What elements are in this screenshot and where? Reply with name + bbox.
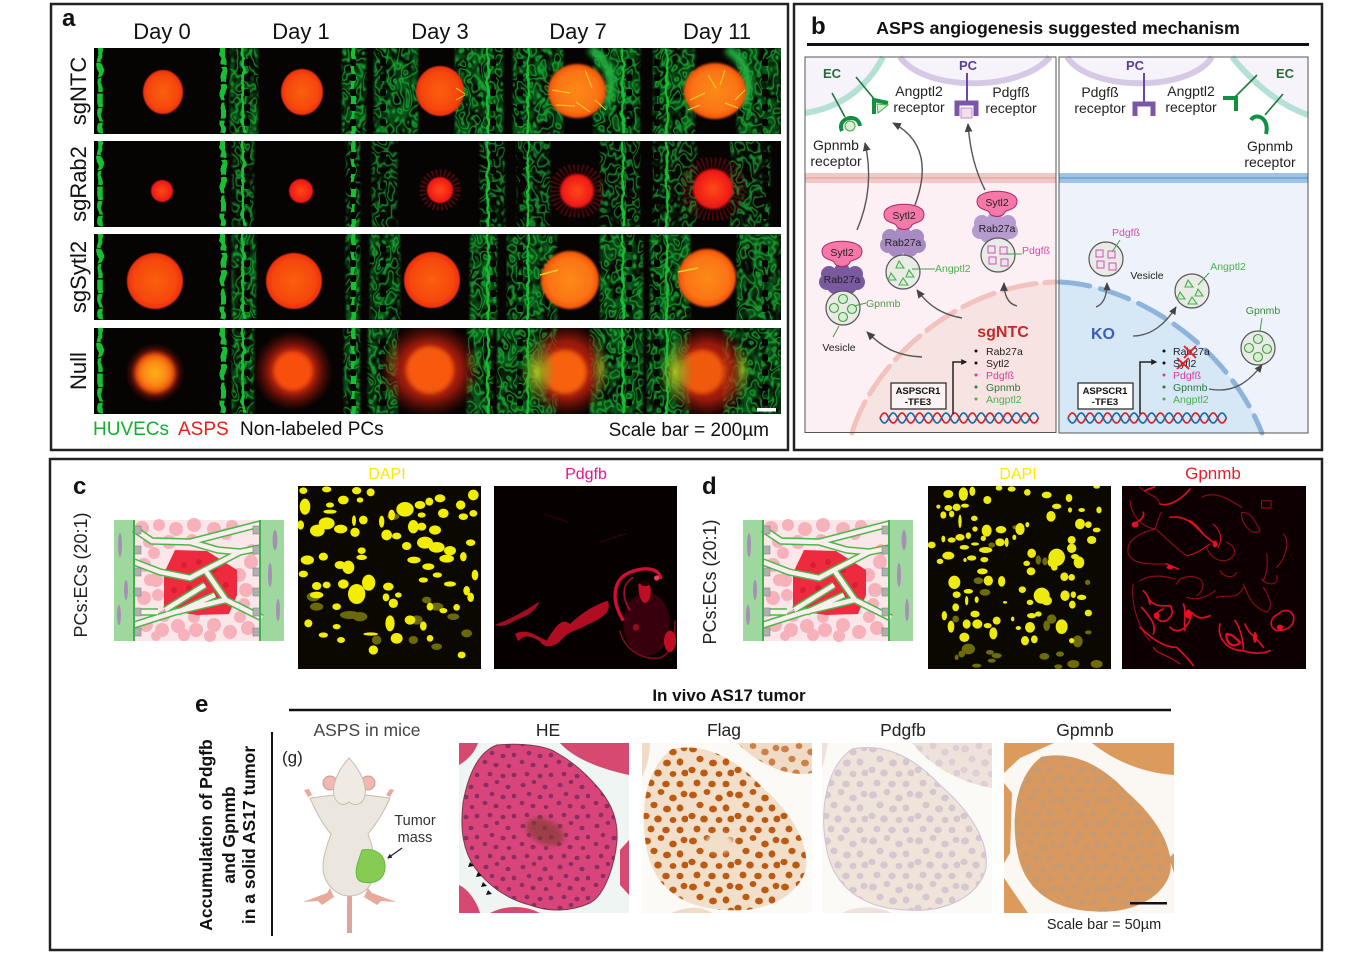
day column headers: Day 3 xyxy=(411,19,469,44)
day column headers: Day 7 xyxy=(549,19,607,44)
day column headers: Day 11 xyxy=(683,19,751,44)
vesicle complexes: Sytl2 xyxy=(892,210,916,222)
free vesicles xyxy=(1089,227,1280,365)
Flag heading: Flag xyxy=(707,720,741,740)
panel letter c: c xyxy=(73,473,86,500)
row labels: sgNTC xyxy=(66,57,91,125)
gene list with crosses: Angptl2 xyxy=(1173,394,1209,406)
scale bar xyxy=(757,408,776,412)
receptor labels: receptor xyxy=(1244,154,1296,170)
secretion arrows xyxy=(1096,283,1262,390)
gene list: Sytl2 xyxy=(986,358,1010,370)
gene list xyxy=(974,346,1023,406)
gene list: Angptl2 xyxy=(986,394,1022,406)
receptors xyxy=(1126,58,1295,134)
scale bar caption: Scale bar = 50µm xyxy=(1047,917,1161,933)
DAPI micrograph xyxy=(297,486,481,669)
day column headers xyxy=(133,19,751,44)
row sgRab2 image strip xyxy=(94,141,781,227)
transcription factor box: ASPSCR1 xyxy=(896,386,941,397)
scale bar xyxy=(1130,902,1167,904)
legend: Non-labeled PCs xyxy=(240,419,384,440)
transcription factor box xyxy=(1078,383,1133,409)
Pdgfb micrograph xyxy=(494,486,677,669)
transcription factor box: -TFE3 xyxy=(1092,397,1118,408)
receptor labels: receptor xyxy=(985,100,1037,116)
receptor labels: Pdgfß xyxy=(1081,84,1119,100)
vesicle complexes: Vesicle xyxy=(822,342,856,354)
row labels: sgRab2 xyxy=(66,146,91,222)
KO label: KO xyxy=(1091,326,1115,343)
tumor mass label xyxy=(388,813,436,858)
row sgNTC image strip xyxy=(94,48,781,134)
receptor labels: receptor xyxy=(1165,99,1217,115)
co-culture schematic xyxy=(743,518,913,642)
gene list: Pdgfß xyxy=(986,370,1014,382)
section title: In vivo AS17 tumor xyxy=(652,686,806,705)
EC and PC receptors xyxy=(823,58,978,131)
receptor labels: Gpnmb xyxy=(1247,138,1293,154)
vertical description: in a solid AS17 tumor xyxy=(239,746,259,924)
gene list: Rab27a xyxy=(986,346,1023,358)
panel letter b: b xyxy=(811,13,826,40)
DAPI heading: DAPI xyxy=(368,466,406,483)
DAPI heading: DAPI xyxy=(999,466,1037,483)
panel letter e: e xyxy=(195,691,208,718)
Gpnmb micrograph xyxy=(1122,486,1306,669)
panel d xyxy=(700,464,1306,669)
icon: mouse with tumor xyxy=(303,758,396,933)
row Null image strip xyxy=(94,328,781,414)
panel c xyxy=(71,466,677,669)
secretion arrows xyxy=(857,123,1017,357)
Pdgfb heading: Pdgfb xyxy=(565,466,607,483)
vesicle complexes: Angptl2 xyxy=(935,263,971,275)
g label: (g) xyxy=(282,748,303,767)
free vesicles: Vesicle xyxy=(1130,270,1164,282)
axis label: PCs:ECs (20:1) xyxy=(71,512,91,638)
receptor labels: Pdgfß xyxy=(992,84,1030,100)
row labels: Null xyxy=(66,352,91,390)
panel letter a: a xyxy=(62,5,76,32)
gene list with crosses: Rab27a xyxy=(1173,346,1210,358)
vesicle complexes: Sytl2 xyxy=(830,247,854,259)
receptor labels: Angptl2 xyxy=(895,83,943,99)
panel b title: ASPS angiogenesis suggested mechanism xyxy=(876,18,1240,38)
receptor labels: receptor xyxy=(1074,100,1126,116)
legend: Scale bar = 200µm xyxy=(609,420,769,441)
HE micrograph xyxy=(459,743,629,913)
transcription arrow xyxy=(953,362,966,414)
panel e xyxy=(195,686,1174,936)
transcription factor box: -TFE3 xyxy=(905,397,931,408)
HE heading: HE xyxy=(536,720,560,740)
vesicle complexes: Sytl2 xyxy=(985,197,1009,209)
DNA xyxy=(880,413,1038,423)
receptor labels: Angptl2 xyxy=(1167,83,1215,99)
receptor labels: Gpnmb xyxy=(813,137,859,153)
receptor labels xyxy=(810,83,1037,169)
transcription factor box: ASPSCR1 xyxy=(1083,386,1128,397)
free vesicles: Pdgfß xyxy=(1112,227,1140,239)
transcription factor box xyxy=(891,383,946,409)
vertical description: Accumulation of Pdgfb xyxy=(196,739,216,931)
tumor mass label: Tumor xyxy=(394,813,436,829)
legend: HUVECs xyxy=(93,419,169,440)
panel b: suggested mechanism xyxy=(794,4,1322,450)
gene list with crosses: Pdgfß xyxy=(1173,370,1201,382)
gene list: Gpnmb xyxy=(986,382,1021,394)
free vesicles: Angptl2 xyxy=(1210,261,1246,273)
mouse heading: ASPS in mice xyxy=(314,720,420,740)
day column headers: Day 0 xyxy=(133,19,191,44)
legend: ASPS xyxy=(178,419,229,440)
receptor labels: receptor xyxy=(810,153,862,169)
row sgSytl2 image strip xyxy=(94,234,781,320)
co-culture schematic xyxy=(114,518,284,642)
Gpmnb heading: Gpmnb xyxy=(1056,720,1114,740)
EC and PC receptors: EC xyxy=(823,66,842,81)
vesicle complexes: Rab27a xyxy=(979,223,1016,235)
vesicle complexes: Rab27a xyxy=(824,274,861,286)
EC and PC receptors: PC xyxy=(959,58,978,73)
nucleus xyxy=(1060,282,1262,433)
sgNTC label: sgNTC xyxy=(977,324,1029,341)
gene list with crosses: Sytl2 xyxy=(1173,358,1197,370)
DNA xyxy=(1068,413,1226,423)
receptor labels xyxy=(1074,83,1296,170)
tumor mass label: mass xyxy=(398,830,432,846)
vesicle complexes: Gpnmb xyxy=(866,298,901,310)
transcription arrow xyxy=(1140,362,1156,414)
DAPI micrograph xyxy=(928,485,1111,669)
KO cell diagram xyxy=(1059,57,1308,433)
row labels xyxy=(66,57,91,390)
vesicle complexes: Pdgfß xyxy=(1022,245,1050,257)
vesicle complexes xyxy=(819,191,1050,354)
Gpnmb heading: Gpnmb xyxy=(1185,464,1241,483)
free vesicles: Gpnmb xyxy=(1246,305,1280,317)
Pdgfb heading: Pdgfb xyxy=(880,720,926,740)
Gpmnb IHC micrograph xyxy=(1004,743,1174,913)
receptor labels: receptor xyxy=(893,99,945,115)
gene list with crosses: Gpnmb xyxy=(1173,382,1208,394)
Pdgfb IHC micrograph xyxy=(822,743,992,913)
axis label: PCs:ECs (20:1) xyxy=(700,519,720,645)
row labels: sgSytl2 xyxy=(66,241,91,313)
receptors: PC xyxy=(1126,58,1145,73)
vertical description xyxy=(196,739,259,931)
Flag micrograph xyxy=(642,743,812,913)
panel c d e frame xyxy=(50,459,1322,950)
panel letter d: d xyxy=(702,473,717,500)
gene list with crosses xyxy=(1162,346,1210,406)
vertical description: and Gpnmb xyxy=(219,786,239,884)
day column headers: Day 1 xyxy=(272,19,330,44)
vesicle complexes: Rab27a xyxy=(885,237,922,249)
legend xyxy=(93,419,769,441)
receptors: EC xyxy=(1276,66,1295,81)
sgNTC cell diagram xyxy=(805,57,1056,433)
panel a: spheroid time course xyxy=(0,4,788,450)
nucleus xyxy=(852,282,1056,433)
